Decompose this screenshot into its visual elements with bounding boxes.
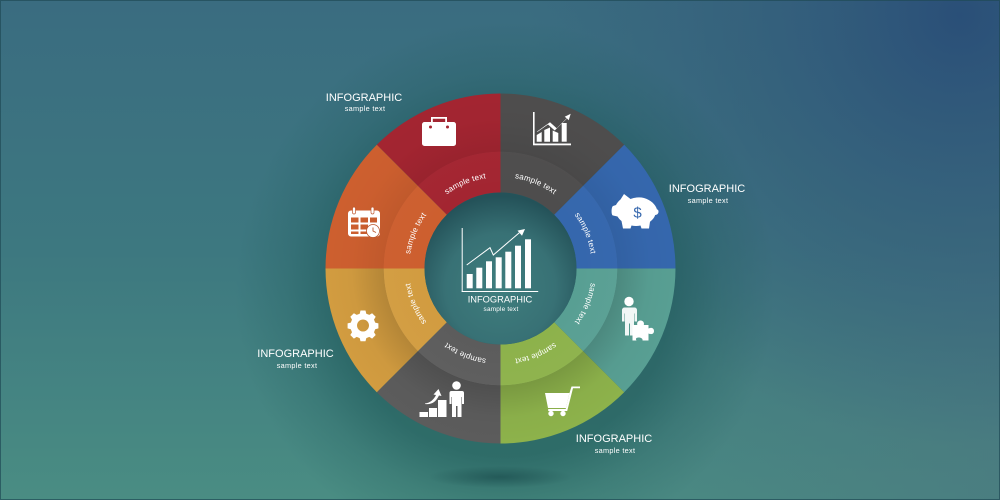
caption: yellow: sample text [405,283,426,324]
segment: teal [554,268,676,392]
icon: piggy bank [612,194,659,228]
segment: yellow [326,268,447,392]
label: bottom [576,433,652,455]
caption: teal: sample text [574,283,595,324]
segment: dark grey [500,94,624,215]
label: right [669,183,745,205]
centre label: INFOGRAPHIC [468,294,533,304]
icon: shopping cart [545,386,580,416]
caption: orange: sample text [406,212,426,254]
centre hub [424,192,576,344]
label: right: INFOGRAPHIC [669,183,745,195]
icon: person on stairs [420,381,464,417]
label: top left: INFOGRAPHIC [326,92,402,104]
caption: blue: sample text [575,213,596,254]
label: bottom: INFOGRAPHIC [576,433,652,445]
ring chart [326,94,676,444]
segment: orange [326,145,447,268]
icon: person with puzzle piece [622,297,654,340]
floor shadow [428,466,572,488]
caption: dark grey: sample text [515,174,556,194]
segment: green [500,322,624,444]
icon: briefcase [422,117,456,146]
caption: grey: sample text [444,342,486,363]
centre label [468,294,533,313]
icon: piggy bank: $ [633,204,642,222]
label: top left [326,92,402,113]
centre label: sample text [484,306,518,313]
label: left: sample text [277,361,317,370]
caption: red: sample text [445,173,486,194]
segment: grey [377,322,500,444]
label: left: INFOGRAPHIC [257,348,334,360]
label: top left: sample text [345,104,385,113]
icon: central bar chart [462,228,538,292]
label: bottom: sample text [595,446,635,455]
icon: growth chart [533,112,571,145]
label: left [257,348,334,370]
caption: green: sample text [515,343,556,364]
icon: gear [348,310,378,341]
segment: blue [554,145,676,268]
segment captions [405,173,596,364]
segment: red [377,94,500,215]
icon: calendar with clock [348,207,380,238]
label: right: sample text [688,196,728,205]
